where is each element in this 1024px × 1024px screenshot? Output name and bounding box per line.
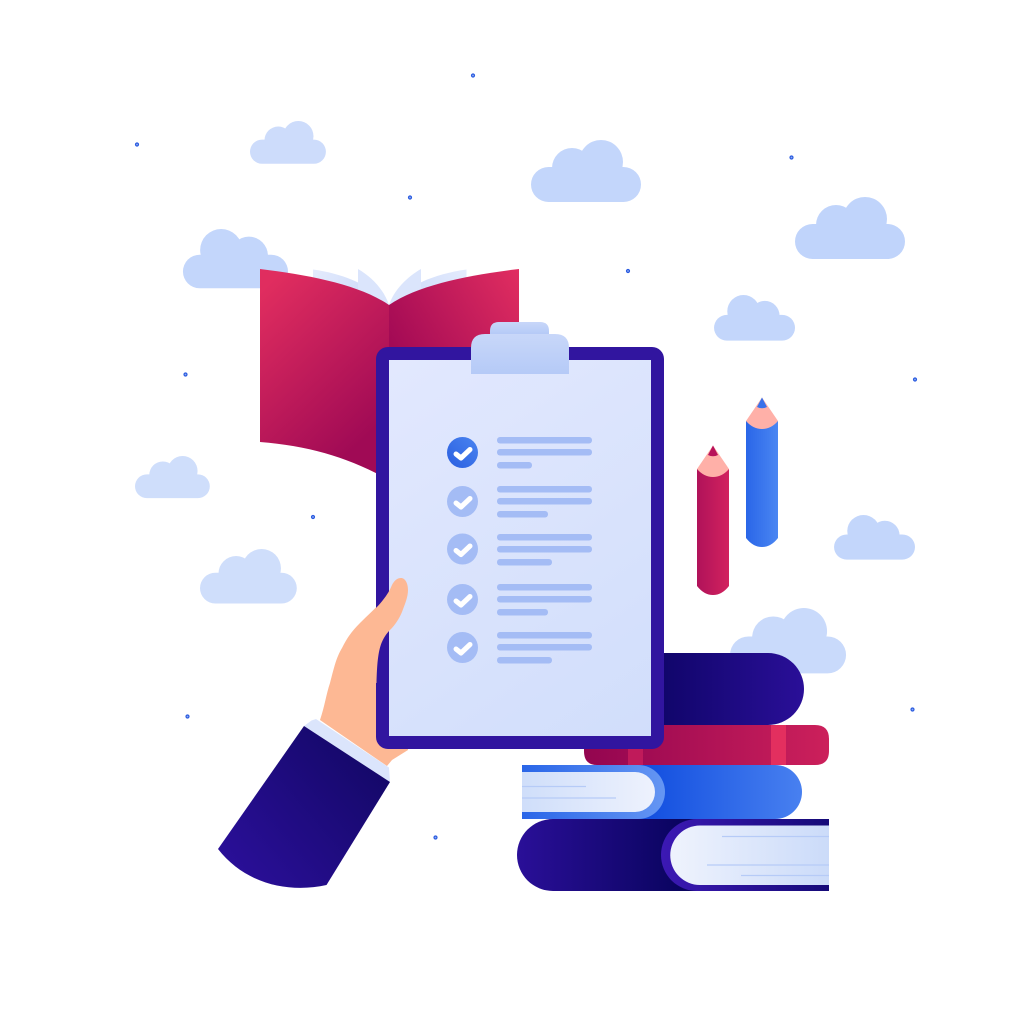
shirt cuff (304, 719, 390, 782)
blue pencil (746, 398, 778, 547)
checklist row 4 (447, 584, 592, 616)
cloud left lower (200, 549, 297, 604)
thumb over board (370, 578, 408, 683)
blue book (522, 765, 802, 819)
cloud top centre (531, 140, 641, 202)
scattered dots (136, 74, 916, 839)
suit sleeve (218, 726, 390, 888)
bottom navy book (517, 819, 829, 891)
checklist row 3 (447, 534, 592, 566)
arm and hand (218, 578, 408, 888)
clip (471, 322, 569, 374)
clipboard (376, 322, 664, 749)
left cover (260, 269, 389, 480)
checklist row 2 (447, 486, 592, 518)
book pages (313, 269, 466, 305)
paper sheet (389, 360, 651, 736)
red pencil (697, 446, 729, 595)
cloud behind book stack (730, 608, 846, 673)
board frame (376, 347, 664, 749)
stack of books (517, 653, 829, 891)
top navy book (650, 653, 804, 725)
cloud top left (250, 121, 326, 164)
right cover (389, 269, 519, 480)
checklist row 5 (447, 632, 592, 664)
cloud right middle (714, 295, 795, 341)
cloud left middle (135, 456, 210, 498)
cloud top right (795, 197, 905, 259)
cloud behind open book (183, 229, 288, 288)
cloud right lower (834, 515, 915, 560)
palm behind board (320, 578, 408, 766)
checklist row 1 (447, 437, 592, 468)
open red book (260, 269, 519, 480)
red book (584, 725, 829, 765)
